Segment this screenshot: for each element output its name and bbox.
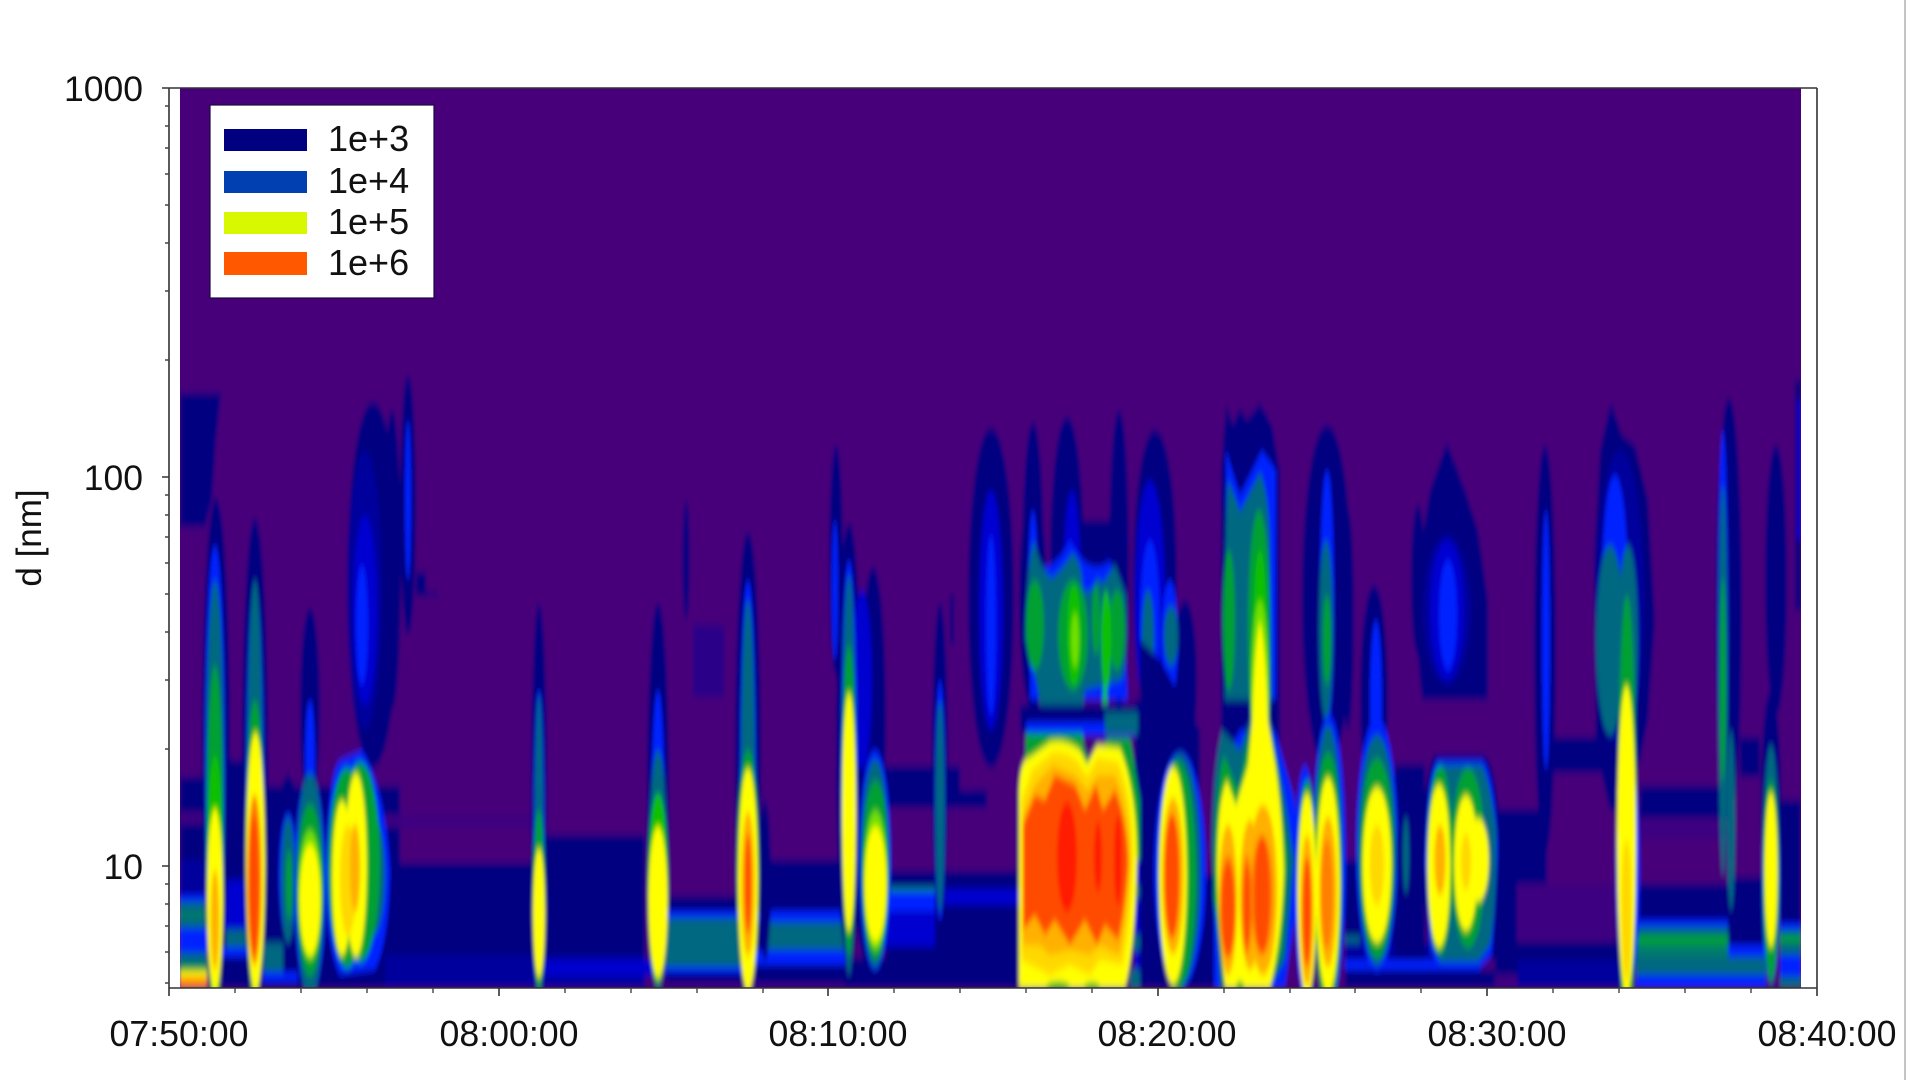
thin teal spike 08:13 bbox=[932, 594, 954, 920]
double plume 07:55 bbox=[326, 750, 390, 975]
small teal plume bbox=[276, 775, 300, 945]
spike 08:07 bbox=[735, 532, 771, 992]
spike 07:52 bbox=[242, 518, 268, 1020]
y tick labels bbox=[64, 69, 143, 887]
big high-concentration block 08:16-08:19 bbox=[1019, 690, 1140, 994]
vertical plume spikes bbox=[202, 445, 1780, 1035]
right edge rule bbox=[1904, 0, 1906, 1080]
plume 07:54 bbox=[294, 608, 326, 997]
paired spikes 08:10 bbox=[829, 445, 891, 975]
x tick labels: 08:10:00 bbox=[769, 1014, 907, 1054]
x tick labels: 08:20:00 bbox=[1098, 1014, 1236, 1054]
x tick labels: 08:30:00 bbox=[1428, 1014, 1566, 1054]
large domes, upper region bbox=[347, 375, 1787, 910]
x tick labels: 08:00:00 bbox=[440, 1014, 578, 1054]
x tick labels bbox=[110, 1014, 1896, 1054]
legend entry 1e+4: 1e+4 bbox=[328, 160, 409, 201]
legend entry 1e+6: 1e+6 bbox=[328, 242, 409, 283]
legend bbox=[210, 105, 434, 298]
legend entry 1e+3 bbox=[224, 118, 409, 159]
legend entry 1e+5: 1e+5 bbox=[328, 201, 409, 242]
double plume 08:22 bbox=[1212, 720, 1300, 994]
double plume 08:24 bbox=[1294, 715, 1346, 1008]
y tick labels: 100 bbox=[84, 458, 143, 498]
legend entry 1e+5 bbox=[224, 201, 409, 242]
contour plot: particle size vs time bbox=[170, 80, 1810, 1035]
background concentration bands bbox=[180, 380, 1801, 988]
legend entry 1e+3: 1e+3 bbox=[328, 118, 409, 159]
legend entry 1e+6 bbox=[224, 242, 409, 283]
y axis label: d [nm] bbox=[10, 489, 49, 587]
plume 08:26 bbox=[1356, 718, 1415, 972]
spike 08:01 bbox=[531, 603, 547, 1005]
y tick labels: 1000 bbox=[64, 69, 143, 109]
spike 08:04 bbox=[647, 603, 669, 990]
y tick labels: 10 bbox=[104, 847, 143, 887]
spike 08:34 bbox=[1616, 550, 1640, 1035]
legend entry 1e+4 bbox=[224, 160, 409, 201]
x tick labels: 07:50:00 bbox=[110, 1014, 248, 1054]
double plume 08:28 bbox=[1422, 755, 1500, 970]
spike 07:51 bbox=[202, 498, 230, 1005]
spike 08:38 bbox=[1762, 745, 1780, 985]
x tick labels: 08:40:00 bbox=[1758, 1014, 1896, 1054]
plume 08:20 bbox=[1140, 640, 1206, 990]
